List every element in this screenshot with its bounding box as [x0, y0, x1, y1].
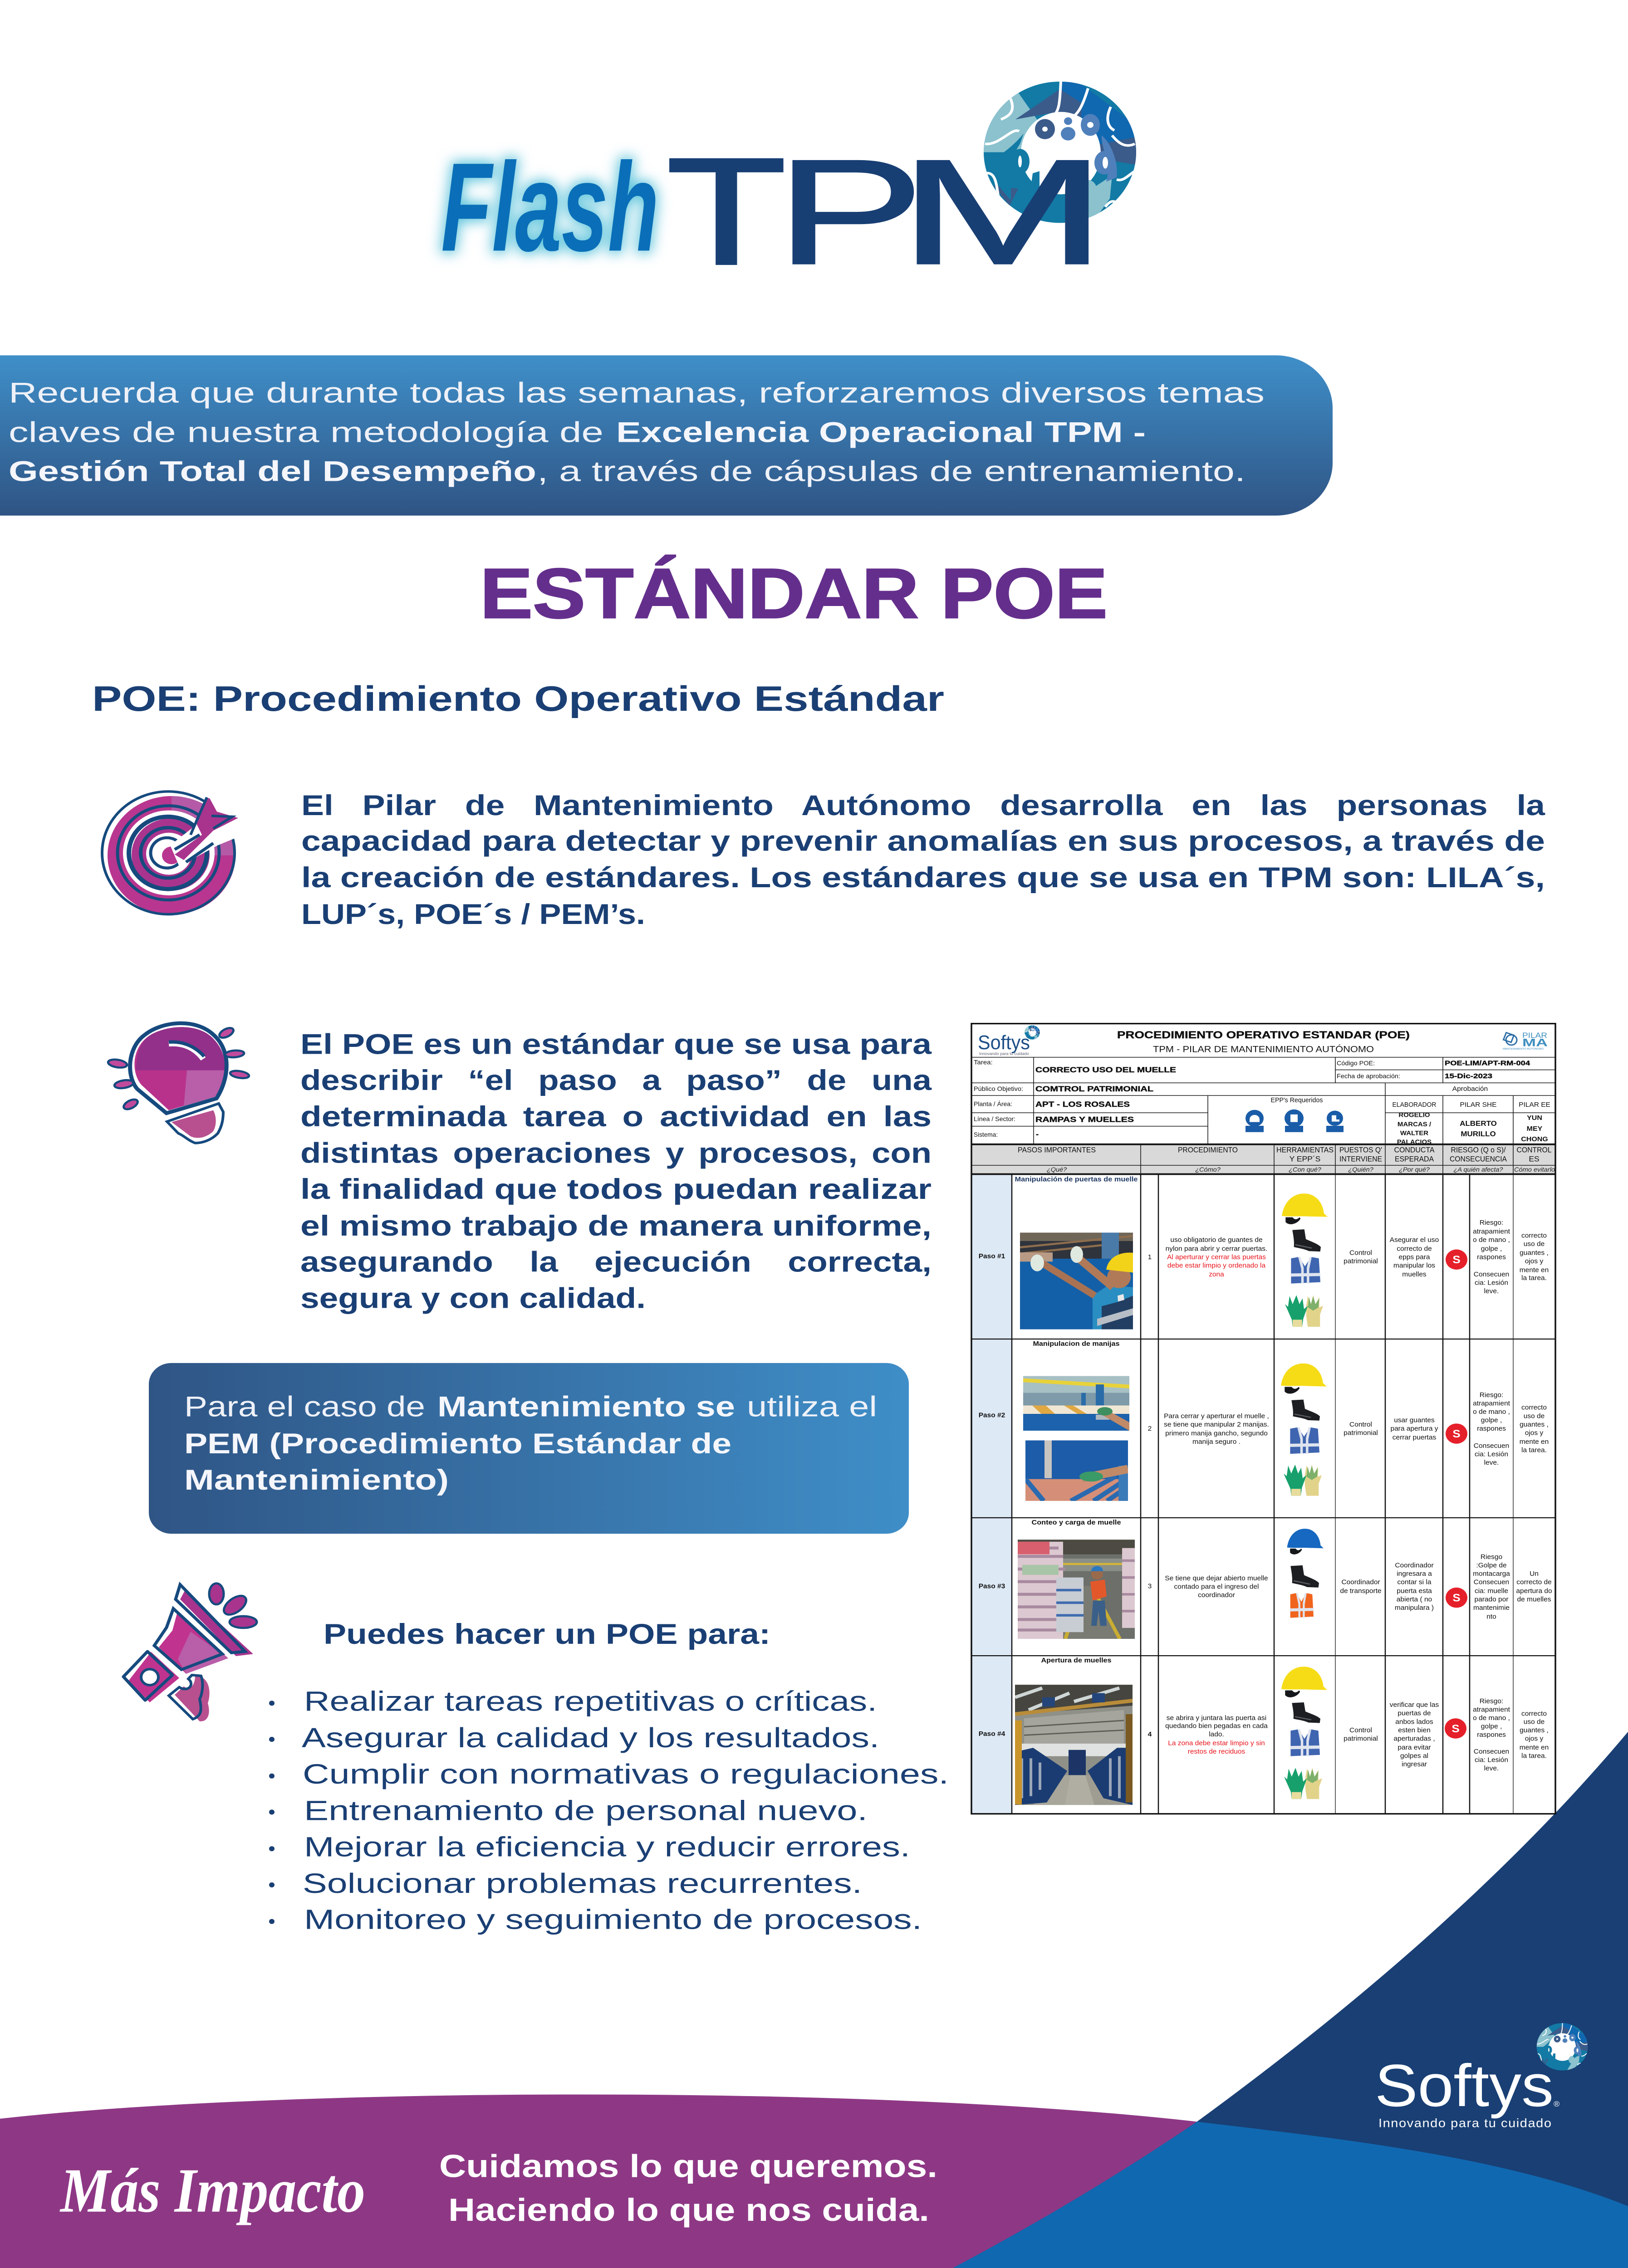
- table column headers: PROCEDIMIENTO: [1178, 1146, 1238, 1154]
- table row: Paso 3: Coordinador: [1395, 1562, 1434, 1569]
- icon: yellow helmet: [1282, 1193, 1328, 1224]
- Softys logo: Softys: [1375, 2053, 1554, 2119]
- table row: Paso 2: mente en: [1520, 1438, 1549, 1446]
- table row: Paso 3: :Golpe de: [1476, 1562, 1507, 1569]
- table meta labels: PILAR SHE: [1460, 1101, 1496, 1109]
- table row: Paso 4: puertas de: [1398, 1710, 1431, 1717]
- table row: Paso 1: o de mano ,: [1473, 1236, 1510, 1244]
- table row: Paso 1: uso de: [1524, 1241, 1545, 1248]
- table column headers: ¿Por qué?: [1399, 1166, 1430, 1173]
- table row: Paso 4: aperturadas ,: [1393, 1735, 1435, 1742]
- table row: Paso 2: para apertura y: [1390, 1425, 1438, 1432]
- table row: Paso 1: uso obligatorio de guantes de: [1170, 1236, 1263, 1244]
- table row: Paso 4: o de mano ,: [1473, 1714, 1510, 1722]
- banner text: claves de nuestra metodología de: [9, 416, 603, 448]
- table meta values: COMTROL PATRIMONIAL: [1035, 1085, 1154, 1093]
- risk badge S: S: [1452, 1428, 1461, 1440]
- table column headers: ¿Con qué?: [1289, 1166, 1321, 1173]
- table meta labels: Aprobación: [1452, 1085, 1488, 1093]
- table row: Paso 2: cerrar puertas: [1393, 1434, 1436, 1441]
- table row: Paso 2: 2: [1148, 1425, 1152, 1432]
- table meta values: MURILLO: [1461, 1130, 1496, 1138]
- paragraph: El POE: la finalidad que todos puedan realizar: [300, 1173, 932, 1205]
- table column headers: Cómo evitarlo: [1514, 1166, 1555, 1173]
- table row: Paso 2: raspones: [1477, 1425, 1506, 1432]
- table row: Paso 4: Control: [1349, 1726, 1372, 1734]
- table row: Paso 4: la tarea.: [1521, 1752, 1547, 1760]
- table column headers: Y EPP´S: [1290, 1155, 1320, 1163]
- risk badge S: S: [1451, 1723, 1460, 1735]
- table column headers: ¿Cómo?: [1195, 1166, 1221, 1173]
- table row: Paso 2: la tarea.: [1521, 1447, 1547, 1454]
- paragraph: El POE: asegurando la ejecución correcta,: [300, 1246, 932, 1278]
- table row: Paso 3: apertura do: [1516, 1587, 1552, 1595]
- paragraph: El POE: determinada tarea o actividad en las: [300, 1100, 932, 1132]
- table row: Paso 1: zona: [1209, 1271, 1225, 1278]
- table row: Paso 3: Un: [1530, 1570, 1539, 1578]
- table row: Paso 1: leve.: [1484, 1287, 1499, 1295]
- table row: Paso 3: parado por: [1475, 1596, 1508, 1603]
- PEM callout text: PEM (Procedimiento Estándar de: [184, 1427, 731, 1460]
- table row: Paso 4: se abrira y juntara las puerta asi: [1167, 1714, 1266, 1722]
- table meta values: CORRECTO USO DEL MUELLE: [1035, 1066, 1176, 1074]
- table row: Paso 1: guantes ,: [1520, 1249, 1549, 1256]
- paragraph: Pilar de Mantenimiento Autónomo: capacidad para detectar y prevenir anomalías en sus procesos, a través de: [301, 825, 1545, 857]
- risk badge S: [1446, 1423, 1467, 1444]
- table meta values: -: [1036, 1130, 1039, 1139]
- table row: Paso 4: anbos lados: [1395, 1718, 1433, 1725]
- table meta values: APT - LOS ROSALES: [1035, 1100, 1130, 1109]
- table row: Paso 3: Conteo y carga de muelle: [1032, 1519, 1121, 1526]
- bulleted list: Asegurar la calidad y los resultados.: [302, 1722, 879, 1754]
- icon: light bulb: [108, 1023, 250, 1143]
- bulleted list: Solucionar problemas recurrentes.: [303, 1868, 862, 1899]
- bottom navy corner shape: [953, 1732, 1628, 2268]
- bulleted list: Mejorar la eficiencia y reducir errores.: [304, 1832, 910, 1862]
- Softys globe: [1532, 2019, 1592, 2071]
- bulleted list: [269, 1686, 949, 1935]
- table row: Paso 4: uso de: [1524, 1718, 1545, 1725]
- subtitle: POE: Procedimiento Operativo Estándar: [92, 679, 944, 719]
- table row: Paso 2: Manipulacion de manijas: [1033, 1340, 1120, 1348]
- table row: Paso 1: Control: [1349, 1249, 1372, 1256]
- photo: handle bottom: [1025, 1440, 1128, 1501]
- paragraph: Pilar de Mantenimiento Autónomo: El Pilar de Mantenimiento Autónomo desarrolla en las personas la: [301, 789, 1545, 821]
- PEM callout text: utiliza el: [747, 1391, 877, 1422]
- table row: Paso 2: leve.: [1484, 1459, 1499, 1466]
- table column headers: PASOS IMPORTANTES: [1018, 1146, 1096, 1154]
- icon: orange vest: [1290, 1593, 1314, 1618]
- icon: target: [102, 792, 243, 915]
- icon: megaphone: [123, 1584, 257, 1721]
- table row: Paso 4: quedando bien pegadas en cada: [1165, 1722, 1268, 1730]
- table row: Paso 3: [979, 1519, 1552, 1639]
- risk badge S: S: [1452, 1592, 1461, 1604]
- table row: Paso 2: cia: Lesión: [1475, 1451, 1508, 1458]
- table row: Paso 3: de muelles: [1517, 1596, 1551, 1603]
- table row: Paso 1: [979, 1176, 1549, 1330]
- table row: Paso 1: mente en: [1520, 1266, 1549, 1274]
- risk badge S: [1445, 1718, 1466, 1739]
- logo word: Flash: Flash: [441, 137, 659, 278]
- table row: Paso 3: Se tiene que dejar abierto muelle: [1165, 1575, 1268, 1582]
- paragraph: Pilar de Mantenimiento Autónomo: la creación de estándares. Los estándares que se usa en TPM son: LILA´s,: [301, 862, 1545, 894]
- table row: Paso 4: La zona debe estar limpio y sin: [1168, 1740, 1265, 1747]
- table row: Paso 1: nylon para abrir y cerrar puertas.: [1166, 1245, 1267, 1252]
- table row: Paso 3: Coordinador: [1341, 1579, 1380, 1586]
- PEM callout text: [184, 1391, 877, 1496]
- table row: Paso 4: Riesgo:: [1480, 1697, 1503, 1705]
- table row: Paso 1: Manipulación de puertas de muelle: [1015, 1176, 1138, 1183]
- table column headers: ¿Qué?: [1047, 1166, 1067, 1173]
- table row: Paso 1: Paso #1: [979, 1252, 1005, 1260]
- table row: Paso 4: Consecuen: [1474, 1748, 1509, 1755]
- icon: gloves: [1284, 1768, 1322, 1799]
- table row: Paso 1: debe estar limpio y ordenado la: [1167, 1262, 1266, 1269]
- icon: boot: [1292, 1702, 1320, 1723]
- table row: Paso 2: manija seguro .: [1192, 1438, 1241, 1446]
- table header logo: Pilar MA: [1503, 1031, 1548, 1051]
- bulleted list: Monitoreo y seguimiento de procesos.: [304, 1904, 922, 1935]
- table row: Paso 1: cia: Lesión: [1475, 1279, 1508, 1286]
- table row: Paso 2: Riesgo:: [1480, 1391, 1503, 1399]
- table row: Paso 4: esten bien: [1398, 1726, 1431, 1734]
- table row: Paso 4: golpe ,: [1481, 1723, 1502, 1730]
- table header logo: Pilar MA: PILAR: [1522, 1031, 1547, 1040]
- table row: Paso 3: abierta ( no: [1397, 1596, 1432, 1603]
- table row: Paso 3: de transporte: [1340, 1587, 1382, 1595]
- table column headers: PUESTOS Q': [1339, 1146, 1382, 1154]
- icon: blue vest: [1290, 1729, 1320, 1756]
- PEM callout text: Mantenimiento): [184, 1464, 449, 1496]
- table row: Paso 1: manipular los: [1393, 1262, 1435, 1269]
- table row: Paso 4: lado.: [1209, 1731, 1224, 1738]
- table row: Paso 3: correcto de: [1516, 1579, 1552, 1586]
- icon: yellow helmet: [1281, 1364, 1327, 1394]
- table row: Paso 3: Paso #3: [979, 1583, 1005, 1590]
- EPP required icons: [1246, 1110, 1344, 1132]
- icon: blue vest: [1291, 1257, 1320, 1284]
- table row: Paso 2: ojos y: [1525, 1429, 1544, 1437]
- Softys logo: ®: [1554, 2100, 1559, 2108]
- table meta labels: Código POE:: [1337, 1060, 1375, 1067]
- logo: Flash TPM: [441, 68, 1149, 296]
- table column headers: INTERVIENE: [1339, 1155, 1382, 1163]
- table meta labels: Tarea:: [974, 1059, 993, 1066]
- table row: Paso 2: se tiene que manipular 2 manijas.: [1164, 1421, 1269, 1428]
- table meta values: 15-Dic-2023: [1445, 1073, 1493, 1080]
- table meta labels: Sistema:: [974, 1131, 998, 1139]
- table row: Paso 2: [979, 1340, 1549, 1501]
- table row: Paso 1: muelles: [1402, 1271, 1427, 1278]
- photo: dock corridor: [1015, 1685, 1133, 1805]
- table column headers: [1018, 1146, 1555, 1173]
- table column headers: CONSECUENCIA: [1450, 1155, 1507, 1163]
- table meta values: RAMPAS Y MUELLES: [1035, 1115, 1134, 1124]
- table row: Paso 2: usar guantes: [1394, 1417, 1435, 1424]
- banner text: , a través de cápsulas de entrenamiento.: [537, 455, 1246, 487]
- table meta values: POE-LIM/APT-RM-004: [1445, 1060, 1530, 1067]
- table row: Paso 1: la tarea.: [1521, 1275, 1547, 1282]
- table row: Paso 2: correcto: [1521, 1404, 1547, 1412]
- table column headers: RIESGO (Q o S)/: [1451, 1146, 1506, 1154]
- table row: Paso 3: contado para el ingreso del: [1174, 1583, 1259, 1591]
- table row: Paso 4: correcto: [1521, 1710, 1547, 1718]
- paragraph: El POE: El POE es un estándar que se usa para: [300, 1028, 932, 1060]
- table meta labels: Línea / Sector:: [974, 1116, 1015, 1123]
- paragraph: Pilar de Mantenimiento Autónomo: LUP´s, POE´s / PEM’s.: [301, 898, 645, 930]
- table meta values: ROGELIO: [1398, 1112, 1430, 1119]
- table meta values: MEY: [1527, 1125, 1543, 1133]
- table meta labels: EPP's Requeridos: [1270, 1097, 1323, 1104]
- table row: Paso 1: Riesgo:: [1480, 1219, 1503, 1227]
- icon: gloves: [1285, 1295, 1323, 1327]
- table meta labels: PILAR EE: [1519, 1101, 1550, 1109]
- table row: Paso 1: golpe ,: [1481, 1245, 1502, 1252]
- table row: Paso 2: Consecuen: [1474, 1442, 1509, 1450]
- table row: Paso 1: patrimonial: [1344, 1258, 1378, 1265]
- table row: Paso 4: leve.: [1484, 1765, 1499, 1772]
- table row: Paso 1: raspones: [1477, 1253, 1506, 1261]
- table row: Paso 2: Control: [1349, 1421, 1372, 1428]
- paragraph: El POE: el mismo trabajo de manera uniforme,: [300, 1210, 932, 1242]
- paragraph: Pilar de Mantenimiento Autónomo: [301, 789, 1545, 930]
- risk badge S: [1446, 1249, 1467, 1270]
- table row: Paso 3: puerta esta: [1397, 1587, 1432, 1595]
- paragraph: El POE: distintas operaciones y procesos, con: [300, 1137, 932, 1169]
- banner text: Excelencia Operacional TPM -: [616, 416, 1146, 448]
- table row: Paso 4: raspones: [1477, 1731, 1506, 1739]
- table row: Paso 1: Consecuen: [1474, 1271, 1509, 1278]
- table row: Paso 4: restos de reciduos: [1188, 1748, 1245, 1755]
- table meta values: YUN: [1527, 1114, 1542, 1122]
- table column headers: ¿Quién?: [1348, 1166, 1373, 1173]
- icon: boot: [1290, 1565, 1319, 1588]
- table meta values: PALACIOS: [1397, 1139, 1432, 1146]
- icon: boot: [1292, 1229, 1321, 1251]
- footer tagline: Haciendo lo que nos cuida.: [448, 2192, 929, 2228]
- table row: Paso 4: mente en: [1520, 1744, 1549, 1751]
- table meta values: ALBERTO: [1460, 1119, 1497, 1128]
- panel: POE form table: [971, 1024, 1555, 1814]
- banner text: [9, 377, 1265, 487]
- table row: Paso 1: Asegurar el uso: [1390, 1236, 1439, 1244]
- icon: blue vest: [1290, 1427, 1319, 1454]
- panel: PEM callout: [149, 1363, 909, 1534]
- footer tagline: [439, 2148, 937, 2228]
- table row: Paso 4: cia: Lesión: [1475, 1756, 1508, 1764]
- table row: Paso 3: 3: [1148, 1583, 1152, 1590]
- photo: worker opening door: [1020, 1232, 1133, 1330]
- photo: handle top: [1023, 1376, 1129, 1431]
- Softys logo: [1375, 2019, 1592, 2130]
- table title: [1117, 1029, 1410, 1054]
- table row: Paso 4: 4: [1148, 1731, 1152, 1738]
- table row: Paso 3: ingresara a: [1397, 1570, 1432, 1578]
- table row: Paso 2: o de mano ,: [1473, 1408, 1510, 1416]
- table row: Paso 2: guantes ,: [1520, 1421, 1549, 1428]
- bulleted list: Entrenamiento de personal nuevo.: [304, 1795, 868, 1826]
- table row: Paso 2: primero manija gancho, segundo: [1165, 1430, 1268, 1437]
- table title: TPM - PILAR DE MANTENIMIENTO AUTÓNOMO: [1153, 1044, 1374, 1054]
- table column headers: ¿A quién afecta?: [1454, 1166, 1503, 1173]
- table meta values: CHONG: [1521, 1136, 1548, 1143]
- table row: Paso 4: ingresar: [1402, 1760, 1427, 1768]
- logo letter P: P: [775, 128, 925, 296]
- logo letter M: M: [897, 128, 1108, 296]
- risk badge S: [1446, 1588, 1467, 1608]
- title: ESTÁNDAR POE: [480, 554, 1108, 633]
- table row: Paso 2: golpe ,: [1481, 1417, 1502, 1424]
- icon: boot: [1291, 1399, 1320, 1421]
- table row: Paso 4: patrimonial: [1344, 1735, 1378, 1742]
- banner text: Recuerda que durante todas las semanas, reforzaremos diversos temas: [9, 377, 1265, 409]
- table header logo: Softys: Softys: [978, 1031, 1030, 1054]
- table row: Paso 4: [979, 1657, 1549, 1805]
- table row: Paso 4: Apertura de muelles: [1041, 1657, 1112, 1664]
- paragraph: El POE: describir “el paso a paso” de una: [300, 1064, 932, 1096]
- table row: Paso 1: epps para: [1399, 1253, 1430, 1261]
- table row: Paso 3: mantenimie: [1473, 1604, 1510, 1612]
- table row: Paso 1: ojos y: [1525, 1258, 1544, 1265]
- table meta labels: Fecha de aprobación:: [1337, 1073, 1400, 1080]
- bulleted list: Cumplir con normativas o regulaciones.: [303, 1759, 949, 1789]
- icon: gloves: [1284, 1465, 1322, 1496]
- logo word: Flash: [441, 137, 659, 278]
- table row: Paso 3: manipulara ): [1395, 1604, 1434, 1612]
- table row: Paso 1: Al aperturar y cerrar las puertas: [1167, 1253, 1266, 1261]
- photo: warehouse counting: [1018, 1540, 1136, 1639]
- table column headers: ESPERADA: [1395, 1155, 1434, 1163]
- table row: Paso 3: Consecuen: [1474, 1579, 1509, 1586]
- table title: PROCEDIMIENTO OPERATIVO ESTANDAR (POE): [1117, 1029, 1410, 1041]
- table row: Paso 3: coordinador: [1198, 1592, 1235, 1599]
- icon: yellow helmet: [1281, 1667, 1327, 1697]
- PEM callout text: Para el caso de: [184, 1391, 425, 1422]
- table row: Paso 2: Paso #2: [979, 1412, 1005, 1419]
- table row: Paso 4: verificar que las: [1390, 1701, 1439, 1709]
- paragraph: El POE: segura y con calidad.: [300, 1282, 646, 1314]
- table row: Paso 3: cia: muelle: [1475, 1587, 1508, 1595]
- table row: Paso 2: patrimonial: [1344, 1429, 1378, 1437]
- table column headers: HERRAMIENTAS: [1276, 1146, 1334, 1154]
- logo word: Flash: Flash: [441, 137, 659, 278]
- table meta labels: ELABORADOR: [1393, 1101, 1437, 1109]
- table row: Paso 4: para evitar: [1398, 1744, 1431, 1751]
- table row: Paso 4: golpes al: [1400, 1752, 1428, 1760]
- table column headers: ES: [1529, 1155, 1540, 1163]
- table row: Paso 2: uso de: [1524, 1413, 1545, 1420]
- bulleted list: Realizar tareas repetitivas o críticas.: [304, 1686, 877, 1717]
- table meta values: WALTER: [1400, 1130, 1429, 1137]
- table row: Paso 3: contar si la: [1398, 1579, 1432, 1586]
- table row: Paso 1: atrapamient: [1473, 1228, 1510, 1235]
- table column headers: CONDUCTA: [1394, 1146, 1435, 1154]
- table row: Paso 4: ojos y: [1525, 1735, 1544, 1742]
- banner text: Gestión Total del Desempeño: [9, 455, 536, 487]
- Más Impacto script: Más Impacto: [59, 2156, 365, 2226]
- table header logo: Softys: Innovando para tu cuidado: [979, 1051, 1029, 1056]
- table meta values: MARCAS /: [1398, 1121, 1431, 1128]
- PEM callout text: Mantenimiento se: [437, 1391, 735, 1422]
- table column headers: CONTROL: [1516, 1146, 1552, 1154]
- table row: Paso 4: atrapamient: [1473, 1706, 1510, 1713]
- table header logo: Pilar MA: MANTENIMIENTO AUTÓNOMO: [1503, 1047, 1544, 1051]
- list heading: Puedes hacer un POE para:: [324, 1618, 770, 1650]
- table row: Paso 2: Para cerrar y aperturar el muelle ,: [1164, 1413, 1269, 1420]
- table meta labels: Público Objetivo:: [974, 1085, 1023, 1093]
- bottom purple band: [0, 2094, 1197, 2268]
- table row: Paso 4: guantes ,: [1520, 1726, 1549, 1734]
- risk badge S: S: [1452, 1254, 1461, 1266]
- table row: Paso 1: correcto de: [1397, 1245, 1432, 1252]
- table row: Paso 1: correcto: [1521, 1232, 1547, 1239]
- table meta labels: Planta / Área:: [974, 1100, 1012, 1108]
- table meta values: [1035, 1060, 1548, 1146]
- logo letter T: T: [667, 127, 786, 296]
- table row: Paso 3: Riesgo: [1481, 1553, 1502, 1561]
- table row: Paso 4: Paso #4: [979, 1730, 1005, 1738]
- banner panel: [0, 355, 1333, 516]
- table row: Paso 2: atrapamient: [1473, 1400, 1510, 1407]
- logo globe: [969, 68, 1149, 224]
- table meta labels: [974, 1059, 1550, 1139]
- footer tagline: Cuidamos lo que queremos.: [439, 2148, 937, 2184]
- table header logo: Softys: [978, 1024, 1041, 1056]
- bottom blue corner shape: [953, 2121, 1628, 2268]
- table row: Paso 3: nto: [1486, 1613, 1496, 1620]
- paragraph: El POE: [300, 1028, 932, 1314]
- table row: Paso 3: montacarga: [1473, 1570, 1510, 1578]
- Softys logo: Innovando para tu cuidado: [1378, 2116, 1551, 2130]
- icon: blue helmet: [1287, 1529, 1324, 1554]
- table row: Paso 1: 1: [1148, 1253, 1152, 1261]
- table header logo: Pilar MA: MA: [1522, 1037, 1548, 1049]
